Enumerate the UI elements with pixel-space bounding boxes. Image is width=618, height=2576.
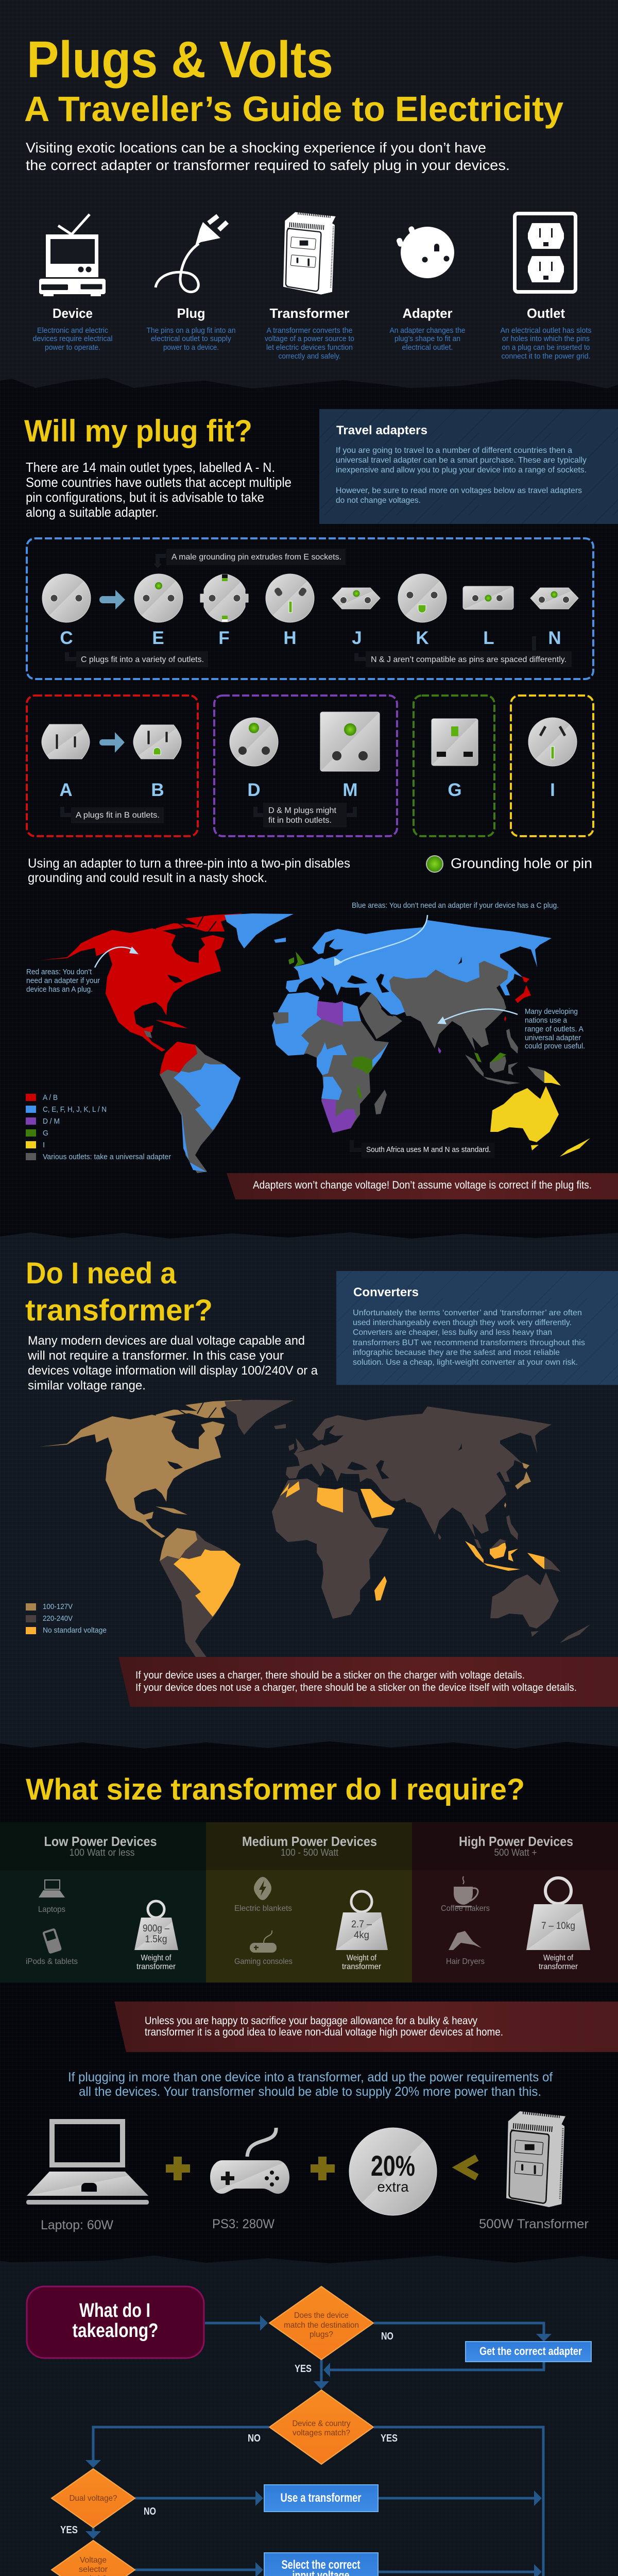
label: weight low: transformer bbox=[136, 1962, 176, 1971]
plug letters: N bbox=[548, 628, 561, 648]
banner: adapters warning bbox=[227, 1173, 618, 1199]
intro text: the correct adapter or transformer required to safely plug in your devices. bbox=[26, 157, 510, 173]
label: transformer: voltage of a power source to bbox=[265, 335, 354, 343]
flow start: what do I take along: What do I bbox=[79, 2300, 150, 2321]
label: weight high: transformer bbox=[539, 1962, 578, 1971]
icon: 20 percent extra: 20% bbox=[371, 2149, 415, 2182]
label: transformer: let electric devices function bbox=[266, 344, 353, 352]
label: adapter: An adapter changes the bbox=[389, 327, 466, 335]
icon: plug B bbox=[133, 725, 181, 759]
label: device bbox=[33, 306, 112, 352]
callout: D and M: D & M plugs might bbox=[268, 806, 337, 815]
panel: high power devices bbox=[412, 1822, 618, 1982]
label: weight low bbox=[136, 1954, 176, 1971]
callout: developing nations: could prove useful. bbox=[525, 1042, 585, 1050]
callout: red areas: Red areas: You don’t bbox=[26, 968, 92, 976]
legend: plug map: I bbox=[43, 1141, 45, 1149]
intro text: Visiting exotic locations can be a shocking experience if you don’t have bbox=[26, 140, 486, 156]
panel: converters bbox=[336, 1271, 618, 1385]
banner: baggage bbox=[114, 2002, 618, 2052]
decision: voltages match: voltages match? bbox=[293, 2429, 350, 2437]
decision: plugs match: Does the device bbox=[294, 2311, 349, 2320]
callout: South Africa: South Africa uses M and N as standard. bbox=[366, 1145, 491, 1154]
callout: developing nations: range of outlets. A bbox=[525, 1025, 583, 1033]
icon: plug D bbox=[230, 718, 278, 766]
label: outlet: on a plug can be inserted to bbox=[502, 344, 590, 352]
text: outlet types: along a suitable adapter. bbox=[26, 504, 159, 520]
decision: plugs match bbox=[269, 2286, 373, 2360]
icon: big transformer bbox=[506, 2111, 565, 2207]
heading: what size transformer: What size transformer do I require? bbox=[26, 1773, 525, 1806]
label: transformer: A transformer converts the bbox=[267, 327, 352, 335]
heading: will my plug fit: Will my plug fit? bbox=[24, 414, 252, 448]
icon: electric blanket bbox=[254, 1877, 271, 1900]
decision: voltages match bbox=[269, 2390, 373, 2464]
label: adapter: Adapter bbox=[403, 306, 452, 321]
panel: converters: infographic because they are the safest and most reliable bbox=[353, 1348, 560, 1357]
text: outlet types: pin configurations, but it is advisable to take bbox=[26, 489, 264, 505]
arrow: C to E bbox=[99, 590, 125, 609]
panel: converters: Converters bbox=[353, 1285, 419, 1299]
label: transformer: Transformer bbox=[270, 306, 349, 321]
callout: grounding pin bbox=[153, 549, 346, 568]
panel: medium power devices: 100 - 500 Watt bbox=[281, 1848, 339, 1858]
flow start: what do I take along: takealong? bbox=[72, 2320, 159, 2342]
panel: converters: used interchangeably even though they work very differently. bbox=[353, 1318, 572, 1327]
label: outlet bbox=[501, 306, 591, 361]
text: dual voltage: similar voltage range. bbox=[28, 1379, 146, 1393]
legend: grounding hole: Grounding hole or pin bbox=[451, 855, 592, 871]
label: weight low: Weight of bbox=[141, 1954, 171, 1962]
text: twenty percent rule: If plugging in more than one device into a transformer, add up the power requirements of bbox=[68, 2070, 553, 2084]
icon: plug L bbox=[463, 586, 513, 609]
callout: A plugs bbox=[62, 807, 164, 823]
label: device: Device bbox=[53, 306, 93, 321]
heading: do I need a transformer: Do I need a bbox=[26, 1257, 177, 1290]
label: transformer bbox=[265, 306, 354, 361]
flowchart bbox=[27, 2286, 592, 2576]
panel: travel adapters: universal travel adapter can be a smart purchase. These are typically bbox=[336, 456, 587, 465]
panel: converters: transformers BUT we recommend transformers throughout this bbox=[353, 1338, 585, 1347]
panel: D and M plugs bbox=[214, 696, 397, 836]
label: coffee makers: Coffee makers bbox=[441, 1904, 490, 1913]
icon: plug M bbox=[320, 712, 380, 771]
icon: plus bbox=[311, 2157, 335, 2180]
label: no: NO bbox=[381, 2331, 393, 2342]
banner: voltage stickers: If your device does not use a charger, there should be a sticker on the device itself with voltage details. bbox=[135, 1682, 577, 1693]
icon: iPod bbox=[42, 1928, 62, 1954]
icon: weight high bbox=[526, 1878, 590, 1950]
callout: red areas: device has an A plug. bbox=[26, 985, 93, 994]
flow arrowheads bbox=[85, 2315, 552, 2576]
plug letters: F bbox=[218, 628, 230, 648]
callout: red areas: need an adapter if your bbox=[26, 976, 100, 985]
icon: weight low bbox=[134, 1901, 178, 1950]
panel: travel adapters: Travel adapters bbox=[336, 423, 427, 437]
plug letters: K bbox=[416, 628, 429, 648]
icon: device bbox=[39, 214, 106, 296]
panel: C type plugs bbox=[27, 538, 593, 679]
banner: baggage: transformer it is a good idea to leave non-dual voltage high power devices at home. bbox=[145, 2026, 503, 2038]
subtitle: A Traveller’s Guide to Electricity bbox=[24, 89, 563, 129]
callout: grounding pin: A male grounding pin extrudes from E sockets. bbox=[171, 553, 341, 562]
text: dual voltage: will not require a transformer. In this case your bbox=[27, 1349, 284, 1363]
text: dual voltage: devices voltage information will display 100/240V or a bbox=[28, 1364, 318, 1378]
decision: plugs match: match the destination bbox=[284, 2321, 359, 2330]
text: outlet types: Some countries have outlets that accept multiple bbox=[26, 474, 291, 490]
decision: dual voltage bbox=[52, 2469, 135, 2528]
callout: N and J: N & J aren’t compatible as pins are spaced differently. bbox=[371, 655, 566, 664]
panel: travel adapters: However, be sure to read more on voltages below as travel adapters bbox=[336, 486, 582, 495]
label: adapter: electrical outlet. bbox=[402, 344, 453, 352]
icon: 20 percent extra bbox=[349, 2128, 437, 2215]
title: Plugs & Volts bbox=[27, 31, 333, 89]
plug letters: L bbox=[483, 628, 494, 648]
action: select input voltage: Select the correct bbox=[281, 2558, 360, 2572]
legend: plug map: C, E, F, H, J, K, L / N bbox=[43, 1105, 107, 1114]
icon: plug H bbox=[266, 574, 314, 622]
action: select input voltage bbox=[264, 2553, 378, 2576]
decision: voltage selector switch: Voltage bbox=[80, 2556, 107, 2565]
text: outlet types: There are 14 main outlet types, labelled A - N. bbox=[26, 460, 275, 475]
decision: voltages match: Device & country bbox=[293, 2419, 350, 2428]
action: get adapter bbox=[466, 2342, 591, 2362]
label: gaming consoles: Gaming consoles bbox=[234, 1957, 293, 1966]
icon: weight medium bbox=[336, 1891, 388, 1950]
label: outlet: connect it to the power grid. bbox=[502, 352, 590, 361]
icon: plug N bbox=[530, 588, 578, 609]
icon: plug C bbox=[42, 574, 91, 622]
icon: weight high: 7 – 10kg bbox=[541, 1921, 575, 1931]
text: grounding warning: grounding and could result in a nasty shock. bbox=[28, 871, 267, 885]
text: twenty percent rule bbox=[68, 2070, 553, 2099]
label: adapter bbox=[389, 306, 466, 352]
panel: medium power devices: Medium Power Devices bbox=[242, 1834, 377, 1849]
icon: plug E bbox=[134, 574, 183, 622]
icon: plug J bbox=[332, 588, 380, 609]
plug letters A B: B bbox=[151, 780, 164, 800]
legend: voltage map bbox=[26, 1602, 107, 1635]
plug letter I: I bbox=[550, 780, 555, 800]
icon: weight medium: 2.7 – bbox=[351, 1919, 372, 1930]
legend: voltage map: No standard voltage bbox=[43, 1626, 107, 1635]
banner: voltage stickers: If your device uses a charger, there should be a sticker on the charger with voltage details. bbox=[135, 1670, 525, 1681]
banner: adapters warning: Adapters won’t change voltage! Don’t assume voltage is correct if the plug fits. bbox=[253, 1179, 592, 1191]
label: PS3: PS3: 280W bbox=[212, 2217, 274, 2231]
icon: plug G bbox=[432, 719, 478, 766]
label: yes: YES bbox=[381, 2433, 398, 2444]
legend: voltage map: 100-127V bbox=[43, 1602, 73, 1611]
callout: South Africa bbox=[352, 1140, 494, 1158]
legend: plug map: G bbox=[43, 1129, 48, 1138]
label: weight medium: Weight of bbox=[347, 1954, 376, 1962]
action: get adapter: Get the correct adapter bbox=[479, 2345, 582, 2358]
icon: plus bbox=[166, 2157, 190, 2180]
label: plug: power to a device. bbox=[163, 344, 219, 352]
label: electric blankets: Electric blankets bbox=[234, 1904, 292, 1913]
label: device: Electronic and electric bbox=[37, 327, 108, 335]
icon: coffee cup bbox=[454, 1876, 478, 1907]
panel: low power devices bbox=[0, 1822, 206, 1982]
plug letters A B bbox=[59, 780, 164, 800]
map: voltage world map bbox=[40, 1400, 590, 1659]
callout: developing nations: Many developing bbox=[525, 1007, 578, 1016]
panel: I plug bbox=[511, 696, 593, 836]
panel: medium power devices bbox=[206, 1822, 412, 1982]
plug letters D M: M bbox=[342, 780, 358, 800]
flow start: what do I take along bbox=[27, 2286, 204, 2358]
plug letters bbox=[60, 628, 561, 648]
legend: plug map: Various outlets: take a universal adapter bbox=[43, 1153, 171, 1161]
callout: developing nations bbox=[437, 1007, 585, 1050]
icon: weight medium: 4kg bbox=[354, 1930, 369, 1941]
icon: plug F bbox=[200, 574, 248, 622]
icon: plug I bbox=[528, 718, 577, 766]
panel: A and B plugs bbox=[27, 696, 198, 836]
label: laptops: Laptops bbox=[38, 1905, 65, 1914]
plug letters D M: D bbox=[247, 780, 261, 800]
legend: plug map bbox=[26, 1093, 171, 1161]
decision: dual voltage: Dual voltage? bbox=[69, 2494, 117, 2503]
icon: plug K bbox=[398, 574, 447, 622]
panel: key terms bbox=[33, 212, 591, 361]
plug letters: H bbox=[283, 628, 297, 648]
icon: weight low: 1.5kg bbox=[145, 1934, 167, 1945]
label: outlet: An electrical outlet has slots bbox=[501, 327, 591, 335]
label: transformer 500W: 500W Transformer bbox=[479, 2217, 589, 2231]
plug letters A B: A bbox=[59, 780, 73, 800]
panel: low power devices: 100 Watt or less bbox=[69, 1848, 135, 1858]
legend: voltage map: 220-240V bbox=[43, 1614, 73, 1623]
panel: converters: solution. Use a cheap, light-weight converter at your own risk. bbox=[353, 1358, 578, 1367]
action: use transformer bbox=[264, 2485, 378, 2512]
decision: plugs match: plugs? bbox=[310, 2330, 333, 2339]
label: weight high bbox=[539, 1954, 578, 1971]
icon: transformer bbox=[283, 212, 336, 295]
panel: converters: Converters are cheaper, less bulky and less heavy than bbox=[353, 1328, 552, 1337]
panel: high power devices: 500 Watt + bbox=[494, 1848, 537, 1858]
text: twenty percent rule: all the devices. Your transformer should be able to supply 20% more power than this. bbox=[79, 2084, 541, 2099]
icon: plug A bbox=[42, 724, 90, 759]
label: hair dryers: Hair Dryers bbox=[446, 1957, 485, 1966]
panel: high power devices: High Power Devices bbox=[459, 1834, 573, 1849]
plug letters D M bbox=[247, 780, 358, 800]
label: iPods: iPods & tablets bbox=[26, 1957, 78, 1966]
decision: voltage selector switch: selector bbox=[79, 2565, 108, 2574]
label: plug: Plug bbox=[177, 306, 205, 321]
label: no: NO bbox=[248, 2433, 261, 2444]
label: plug: The pins on a plug fit into an bbox=[146, 327, 236, 335]
panel: travel adapters: If you are going to travel to a number of different countries then a bbox=[336, 446, 572, 455]
label: plug bbox=[146, 306, 236, 352]
icon: laptop bbox=[39, 1880, 65, 1897]
label: plug: electrical outlet to supply bbox=[151, 335, 232, 343]
icon: 20 percent extra: extra bbox=[377, 2179, 409, 2195]
text: grounding warning bbox=[28, 856, 350, 885]
label: outlet: or holes into which the pins bbox=[502, 335, 590, 343]
arrow: A to B bbox=[99, 732, 125, 753]
panel: travel adapters: do not change voltages. bbox=[336, 496, 421, 505]
label: yes: YES bbox=[60, 2524, 78, 2536]
action: use transformer: Use a transformer bbox=[280, 2491, 362, 2505]
legend: plug map: D / M bbox=[43, 1117, 60, 1126]
callout: D and M bbox=[255, 803, 355, 827]
icon: gaming console bbox=[250, 1930, 277, 1953]
plug letters: C bbox=[60, 628, 73, 648]
icon: big games console bbox=[210, 2128, 289, 2194]
plug letters: E bbox=[152, 628, 164, 648]
panel: converters: Unfortunately the terms ‘converter’ and ‘transformer’ are often bbox=[353, 1309, 582, 1317]
callout: blue areas bbox=[334, 901, 559, 966]
label: device: devices require electrical bbox=[33, 335, 112, 343]
label: device: power to operate. bbox=[45, 344, 100, 352]
flow lines bbox=[93, 2323, 544, 2576]
heading: do I need a transformer: transformer? bbox=[25, 1294, 213, 1327]
label: yes: YES bbox=[295, 2363, 312, 2375]
banner: baggage: Unless you are happy to sacrifice your baggage allowance for a bulky & heavy bbox=[145, 2015, 477, 2027]
text: dual voltage bbox=[27, 1334, 318, 1393]
label: weight medium bbox=[342, 1954, 382, 1971]
callout: C plugs: C plugs fit into a variety of outlets. bbox=[81, 655, 204, 664]
text: outlet types bbox=[26, 460, 291, 520]
legend: plug map: A / B bbox=[43, 1093, 58, 1102]
label: adapter: plug’s shape to fit an bbox=[394, 335, 460, 343]
icon: plug bbox=[156, 216, 227, 292]
panel: travel adapters: inexpensive and allow you to plug your device into a range of sockets. bbox=[336, 466, 587, 474]
callout: C plugs bbox=[67, 651, 208, 667]
icon: hair dryer bbox=[449, 1931, 482, 1950]
banner: voltage stickers bbox=[118, 1657, 618, 1707]
callout: N and J bbox=[356, 636, 572, 667]
label: laptop: Laptop: 60W bbox=[41, 2218, 113, 2232]
text: dual voltage: Many modern devices are dual voltage capable and bbox=[28, 1334, 305, 1348]
callout: A plugs: A plugs fit in B outlets. bbox=[76, 811, 160, 820]
intro text bbox=[26, 140, 510, 173]
callout: developing nations: nations use a bbox=[525, 1016, 568, 1025]
panel: G plug bbox=[414, 696, 494, 836]
panel: low power devices: Low Power Devices bbox=[44, 1834, 157, 1849]
icon: adapter bbox=[396, 226, 454, 278]
callout: blue areas: Blue areas: You don’t need an adapter if your device has a C plug. bbox=[352, 901, 559, 910]
text: grounding warning: Using an adapter to turn a three-pin into a two-pin disables bbox=[28, 856, 350, 871]
callout: red areas bbox=[26, 946, 139, 994]
callout: developing nations: universal adapter bbox=[525, 1033, 581, 1042]
plug letter G: G bbox=[448, 780, 462, 800]
icon: outlet bbox=[515, 213, 576, 292]
label: outlet: Outlet bbox=[527, 306, 565, 321]
icon: big laptop bbox=[26, 2122, 149, 2205]
heading: do I need a transformer bbox=[25, 1257, 213, 1327]
callout: D and M: fit in both outlets. bbox=[268, 816, 332, 825]
icon: less than bbox=[459, 2158, 477, 2177]
panel: travel adapters bbox=[319, 409, 618, 524]
label: no: NO bbox=[144, 2506, 156, 2517]
label: weight high: Weight of bbox=[543, 1954, 573, 1962]
map: plug types world map bbox=[40, 913, 590, 1173]
decision: voltage selector switch bbox=[52, 2540, 135, 2576]
label: weight medium: transformer bbox=[342, 1962, 382, 1971]
plug letters: J bbox=[352, 628, 362, 648]
label: transformer: correctly and safely. bbox=[278, 352, 341, 361]
icon: weight low: 900g – bbox=[143, 1923, 169, 1934]
